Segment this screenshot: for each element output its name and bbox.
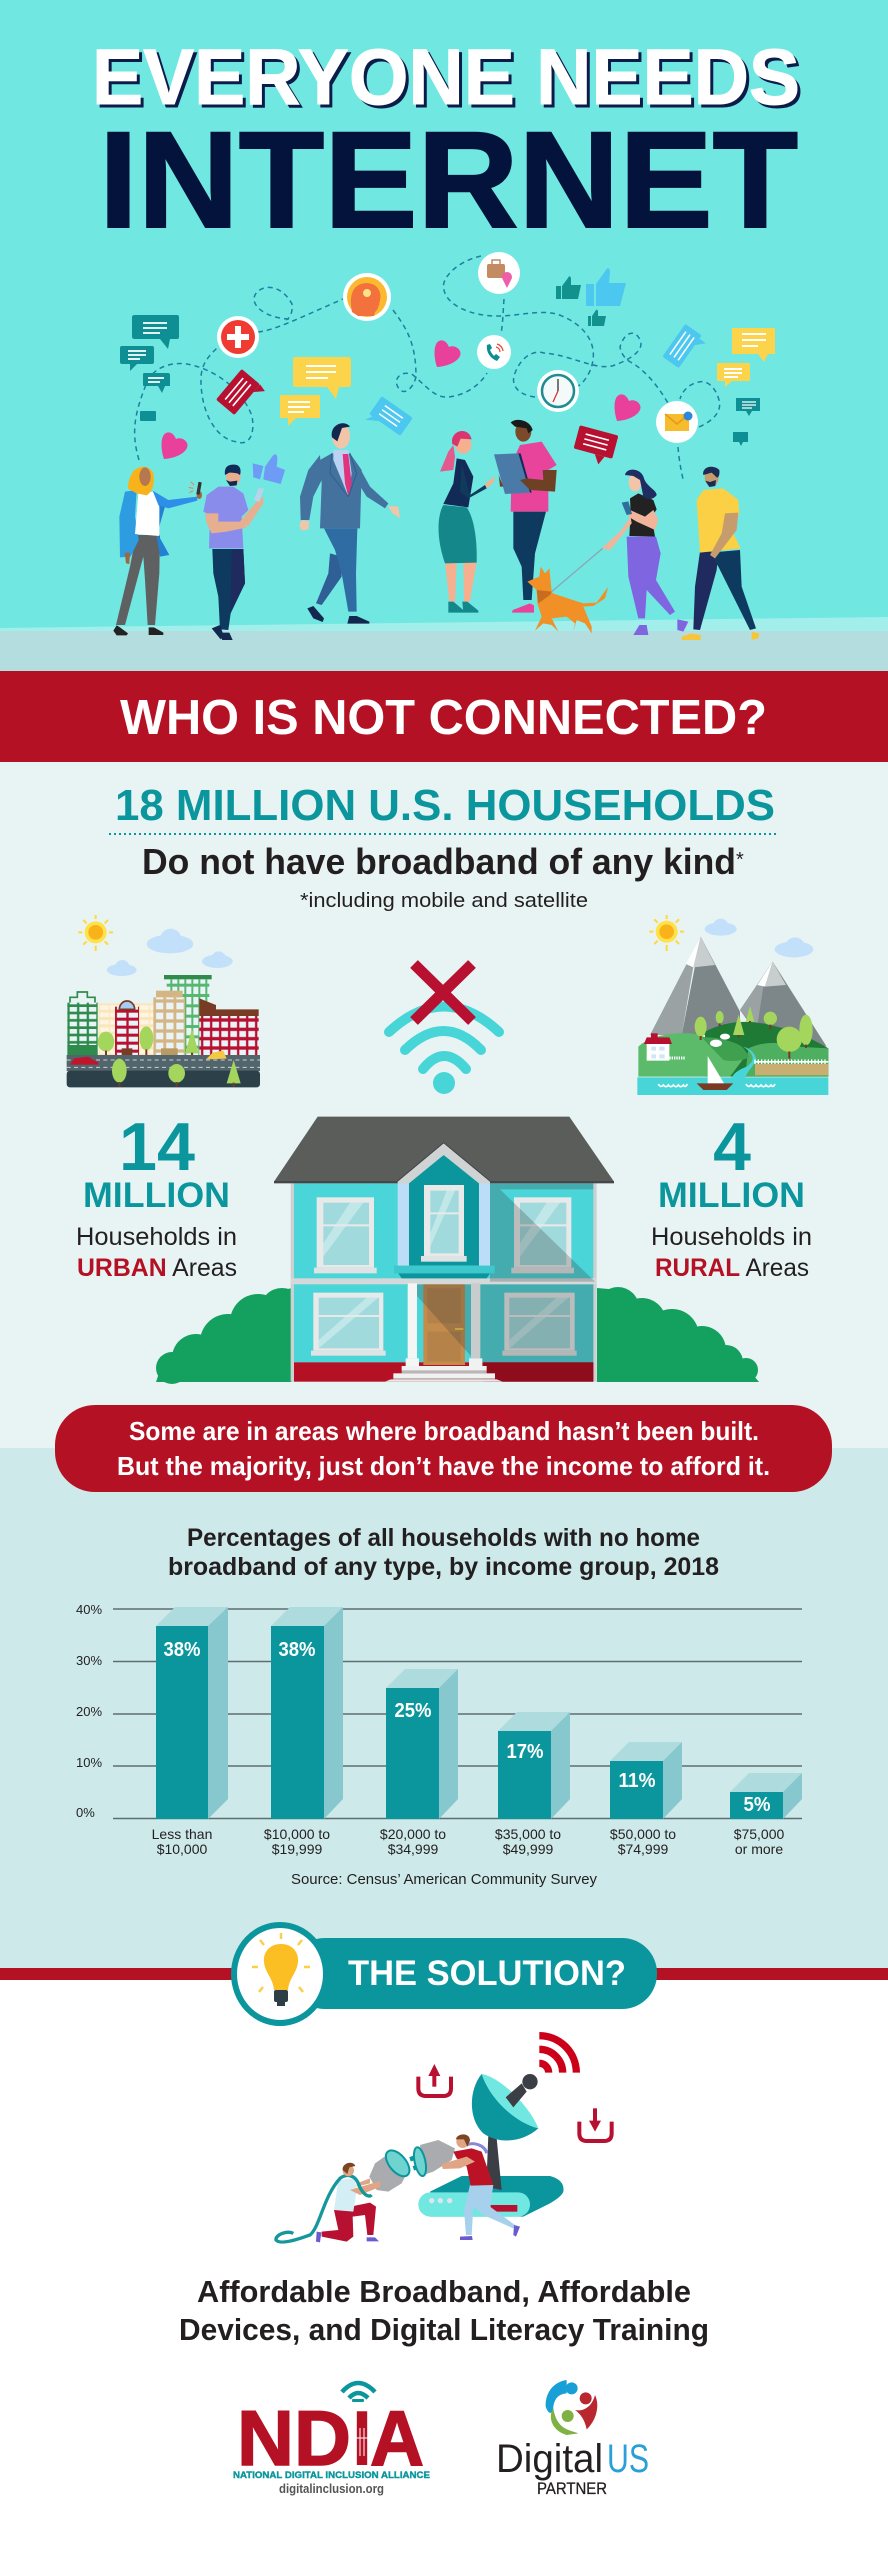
panel: who is not connected background	[0, 762, 888, 1448]
window: lower right	[502, 1293, 577, 1356]
porch	[385, 1266, 503, 1382]
person: man in yellow shirt	[682, 467, 759, 640]
heading: 18 million: Do not have broadband of any kind	[142, 841, 736, 882]
icon: satellite dish	[472, 2074, 538, 2190]
bar: $35,000 to $49,999	[498, 1712, 570, 1819]
roof	[274, 1117, 614, 1183]
stat: 14 million urban: 14	[119, 1109, 195, 1185]
logo: Digital US partner	[496, 2380, 649, 2498]
solution text: Affordable Broadband, Affordable	[197, 2274, 691, 2309]
icon: medical cross	[217, 316, 259, 358]
icon: clock	[537, 370, 579, 412]
bar chart: 0%	[76, 1805, 95, 1820]
illustration: rural	[637, 915, 828, 1095]
logo: NDIA: ND	[237, 2394, 351, 2482]
icon: light bulb	[252, 1933, 310, 2006]
logo: NDIA	[233, 2383, 430, 2496]
icon: blue thumb	[253, 454, 285, 484]
bar: less than $10,000	[156, 1607, 228, 1819]
icon: Digital US people	[546, 2380, 597, 2435]
window: upper left	[314, 1197, 377, 1273]
window: lower left	[311, 1293, 386, 1356]
chat bubbles blue	[365, 324, 708, 442]
bar: $50,000 to $74,999	[610, 1742, 682, 1819]
bar chart: 40%	[76, 1602, 102, 1617]
bar chart: $35,000 to	[495, 1826, 561, 1842]
illustration: bushes	[156, 1287, 759, 1384]
icon: plugs	[369, 2140, 455, 2192]
bar chart: 30%	[76, 1653, 102, 1668]
logo: Digital US partner: US	[607, 2437, 649, 2481]
stat: 14 million urban: Households in	[76, 1223, 237, 1251]
bar chart: $10,000	[157, 1841, 208, 1857]
icon: upload	[418, 2064, 451, 2096]
bar chart: 10%	[76, 1755, 102, 1770]
chart source: Source: Census’ American Community Survey	[291, 1871, 597, 1888]
person: kneeling man	[276, 2163, 381, 2242]
bar chart: $74,999	[618, 1841, 669, 1857]
heading: 18 million	[109, 781, 779, 912]
callout: But the majority, just don’t have the income to afford it.	[117, 1451, 770, 1481]
icon: router	[418, 2176, 563, 2217]
panel: solution background	[0, 1968, 888, 2560]
icon: idea head	[343, 273, 391, 321]
person: woman with hijab	[113, 467, 202, 635]
section header bar: WHO IS NOT CONNECTED?	[120, 691, 767, 745]
solution text	[179, 2274, 709, 2347]
dashed connection lines	[135, 256, 720, 479]
stat: 4 million rural	[651, 1109, 812, 1282]
logo: NDIA: digitalinclusion.org	[279, 2481, 384, 2496]
icon: mail	[656, 401, 698, 443]
shadow lower	[407, 1284, 593, 1362]
window: upper right	[511, 1197, 574, 1273]
stat: 4 million rural: MILLION	[658, 1176, 805, 1215]
person: standing man	[442, 2134, 520, 2240]
icon: briefcase and pin	[478, 252, 520, 294]
chat bubbles red	[216, 369, 618, 467]
bar: $50,000 to $74,999: 11%	[618, 1770, 656, 1792]
bar: $20,000 to $34,999	[386, 1669, 458, 1819]
bar: $10,000 to $19,999: 38%	[278, 1639, 316, 1661]
bar chart: 20%	[76, 1704, 102, 1719]
section header bar	[0, 671, 888, 762]
logo: NDIA: A	[370, 2394, 424, 2482]
chat bubbles yellow	[280, 328, 775, 426]
title	[92, 32, 803, 257]
solution text: Devices, and Digital Literacy Training	[179, 2312, 709, 2347]
icon: phone	[477, 335, 511, 369]
illustration: city	[67, 915, 260, 1087]
chat bubbles teal	[120, 315, 760, 446]
person: man in suit	[299, 423, 400, 624]
icon: thumbs up group	[556, 268, 626, 326]
shadow upper	[490, 1183, 595, 1282]
callout: Some are in areas where broadband hasn’t been built.	[129, 1416, 759, 1446]
bar chart	[76, 1602, 802, 1857]
stat: 4 million rural: RURAL Areas	[655, 1254, 809, 1282]
bar chart: $49,999	[503, 1841, 554, 1857]
icon: signal arcs	[539, 2036, 576, 2073]
title: EVERYONE NEEDS	[92, 32, 800, 121]
bar: $10,000 to $19,999	[271, 1607, 343, 1819]
stat: 4 million rural: Households in	[651, 1223, 812, 1251]
bar chart: $75,000	[734, 1826, 785, 1842]
bar: $35,000 to $49,999: 17%	[506, 1741, 544, 1763]
illustration: satellite, router and plug	[276, 2036, 612, 2242]
stat: 14 million urban	[76, 1109, 237, 1282]
bar chart: or more	[735, 1841, 783, 1857]
heading: the solution	[234, 1925, 657, 2023]
logo: Digital US partner: PARTNER	[537, 2479, 607, 2498]
bar: less than $10,000: 38%	[164, 1639, 201, 1661]
bar: $75,000 or more	[730, 1773, 802, 1819]
title: EVERYONE NEEDS	[95, 35, 803, 124]
logo: NDIA: I	[352, 2394, 372, 2482]
icon: hearts	[162, 340, 640, 459]
heading: the solution: THE SOLUTION?	[348, 1954, 626, 1993]
stat: 14 million urban: URBAN Areas	[77, 1254, 237, 1282]
bar: $75,000 or more: 5%	[744, 1794, 771, 1816]
person: woman in skirt	[439, 431, 495, 613]
callout	[55, 1405, 832, 1492]
dormer	[398, 1143, 490, 1266]
person: woman walking dog	[602, 470, 688, 635]
chart title	[168, 1524, 719, 1581]
logo: Digital US partner: Digital	[496, 2437, 603, 2481]
bar chart: $50,000 to	[610, 1826, 676, 1842]
panel: chart background	[0, 1448, 888, 1969]
bar: $20,000 to $34,999: 25%	[394, 1700, 432, 1722]
stat: 4 million rural: 4	[713, 1109, 751, 1185]
logo: NDIA: NATIONAL DIGITAL INCLUSION ALLIANCE	[233, 2470, 430, 2481]
people group right	[439, 420, 759, 640]
icon: wifi with red X	[389, 964, 499, 1094]
panel: hero background	[0, 0, 888, 672]
heading: 18 million: 18 MILLION U.S. HOUSEHOLDS	[115, 781, 775, 830]
heading: 18 million: *	[736, 849, 744, 871]
bar chart: $20,000 to	[380, 1826, 446, 1842]
people group left	[113, 423, 400, 640]
person: man with tablet	[494, 420, 557, 613]
bar chart: $10,000 to	[264, 1826, 330, 1842]
title: INTERNET	[99, 104, 798, 257]
icon: dog on leash	[527, 548, 608, 633]
bar chart: Less than	[152, 1826, 212, 1842]
stat: 14 million urban: MILLION	[83, 1176, 230, 1215]
bar chart: $34,999	[388, 1841, 439, 1857]
heading: 18 million: *including mobile and satellite	[300, 890, 588, 912]
chart title: Percentages of all households with no home	[187, 1524, 700, 1552]
bar chart: $19,999	[272, 1841, 323, 1857]
icon: download	[579, 2108, 612, 2141]
person: man with phone	[203, 454, 285, 640]
door	[423, 1284, 465, 1365]
chart title: broadband of any type, by income group, 2018	[168, 1553, 719, 1581]
illustration: house	[274, 1117, 614, 1382]
